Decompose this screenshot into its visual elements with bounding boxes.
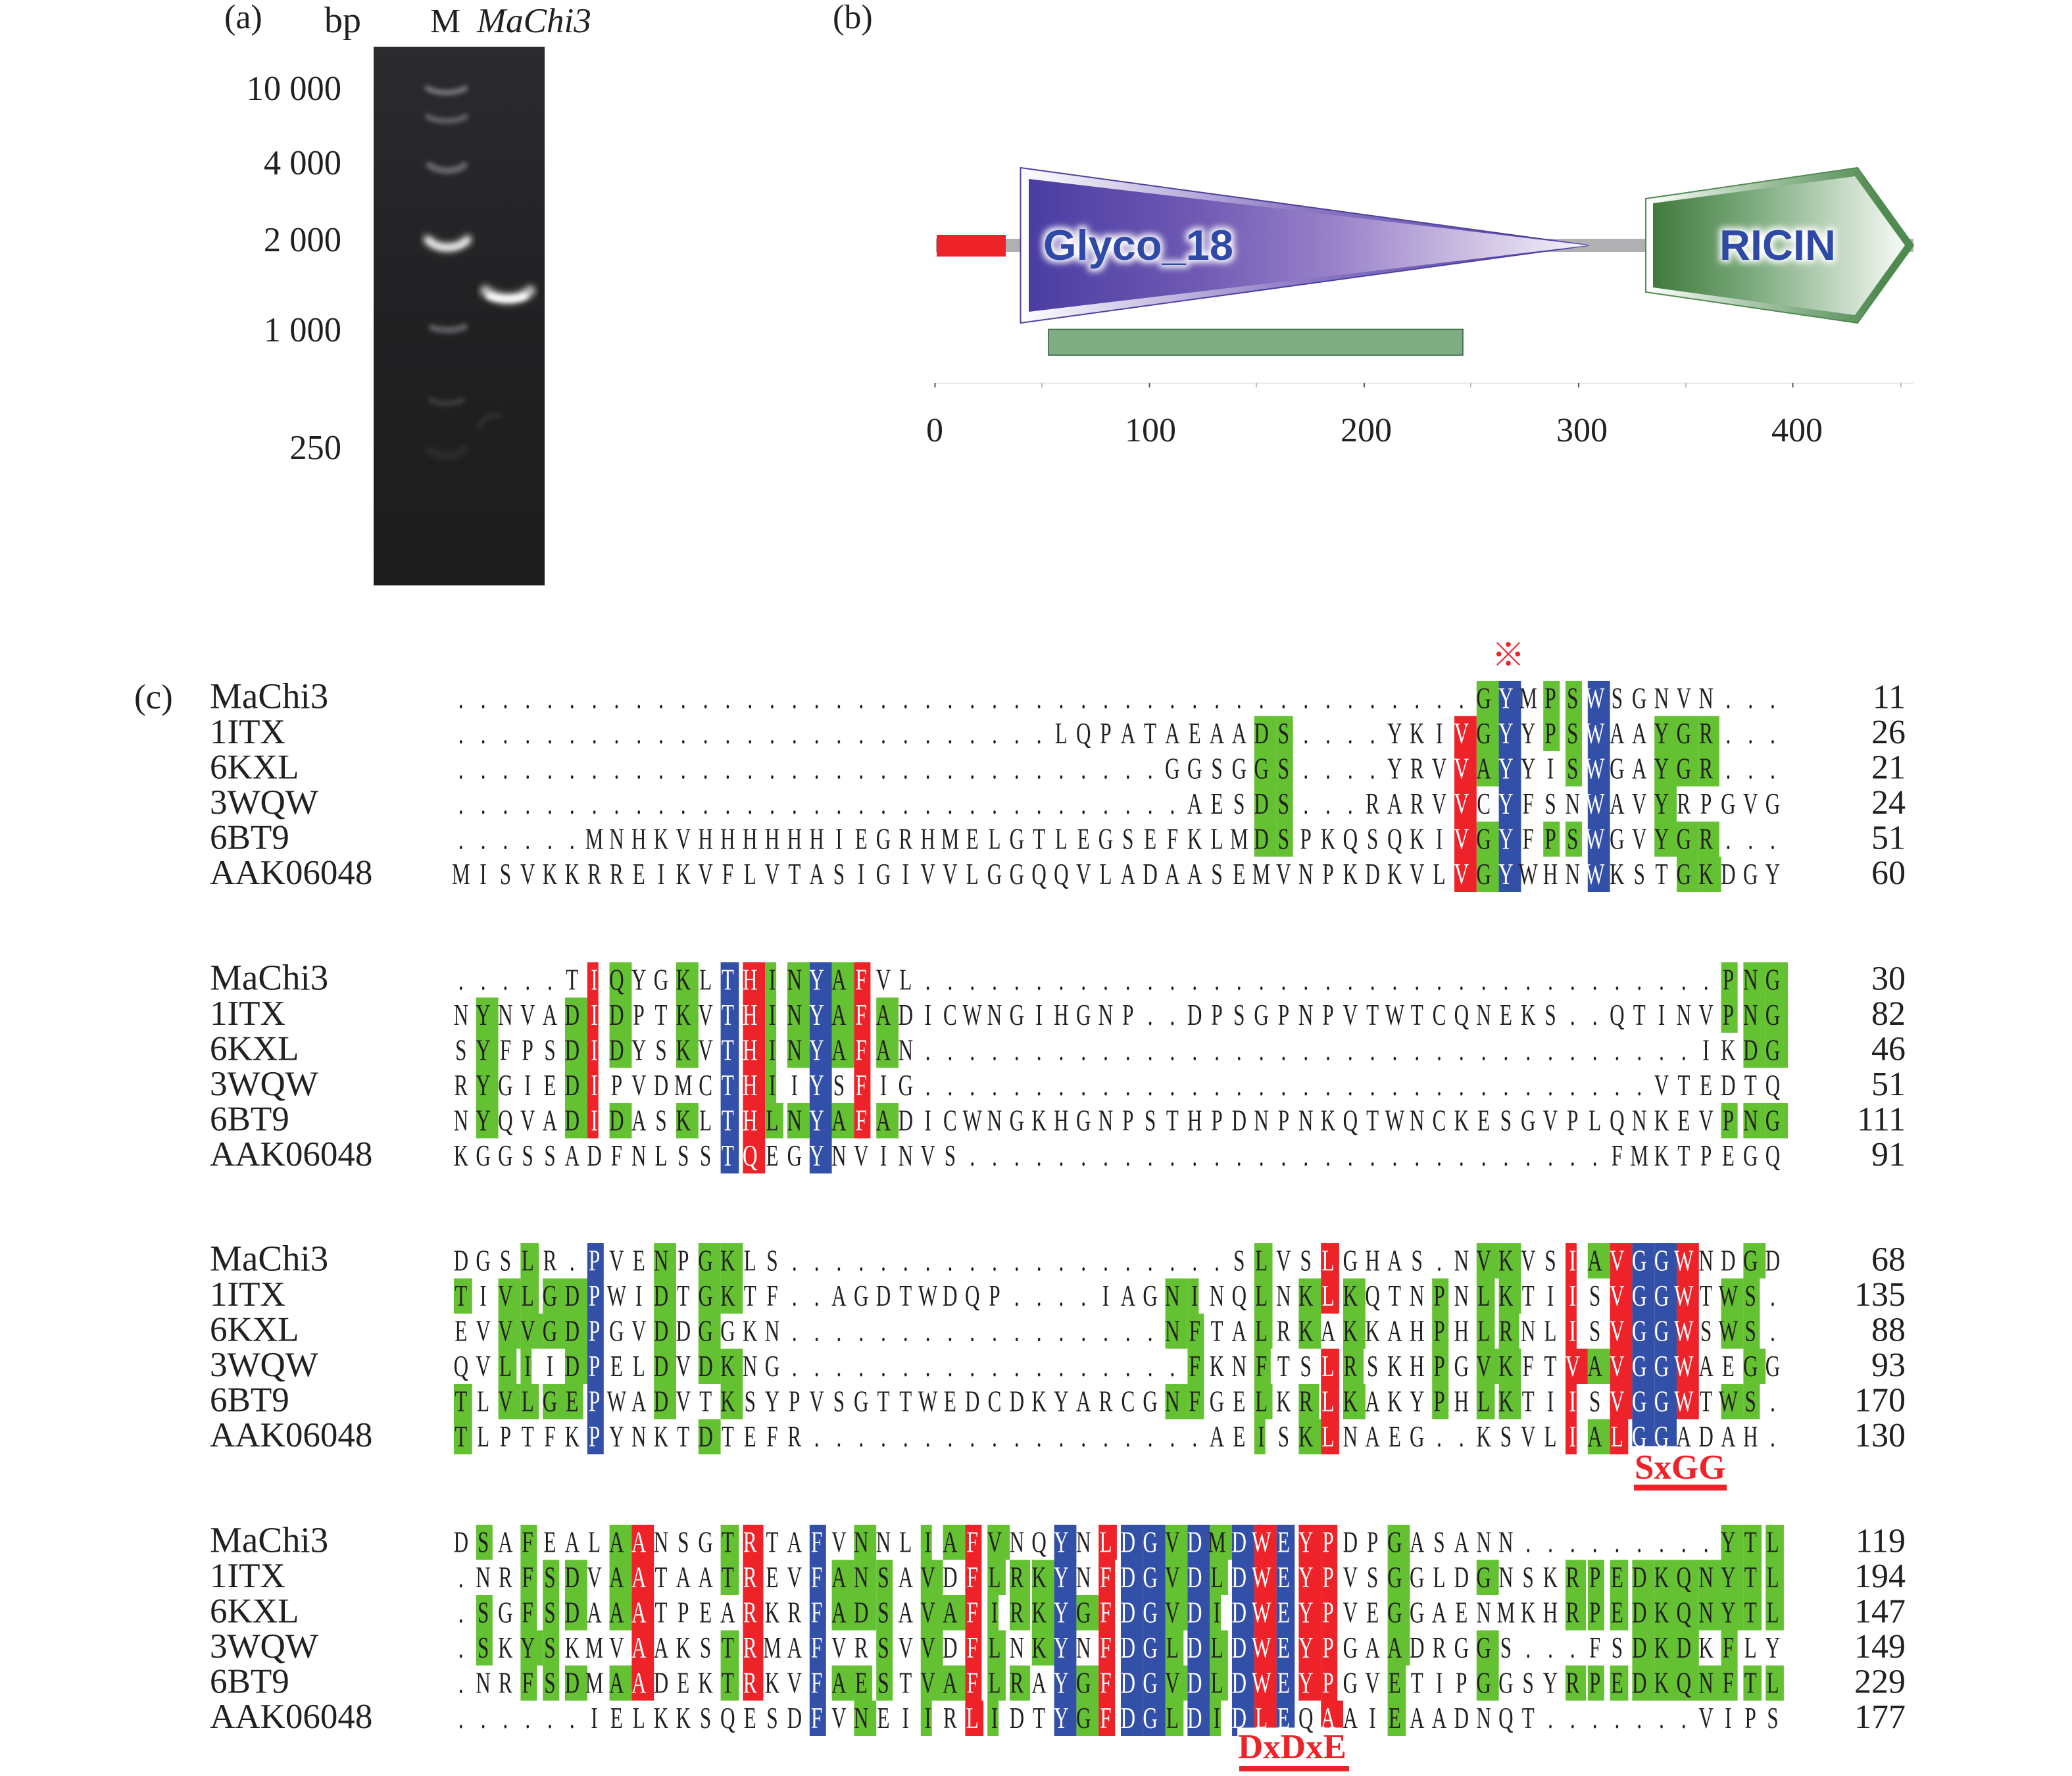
row 6KXL block 3 — [210, 1310, 1906, 1348]
row AAK06048 block 3: TLPTFK P YNKTDTEFR..................AEISK L NAEG..KSVL I A LGGADAH. — [455, 1420, 1775, 1454]
label MaChi3 lane: MaChi3 — [476, 2, 591, 40]
marker size labels — [247, 70, 341, 467]
row 6KXL block 4 — [210, 1592, 1906, 1630]
row 1ITX block 4: .NRFSDVAA TAAT R EV F ANSAVD F LRKYN FDGVD L DWEYP VSGGLDGNSKRPEDKQNYTL — [458, 1561, 1779, 1594]
row MaChi3 block 3: 68 — [1871, 1241, 1906, 1279]
scale axis: 300 — [1556, 412, 1608, 449]
row 6BT9 block 2: 111 — [1857, 1101, 1906, 1138]
row 3WQW block 2: 51 — [1871, 1066, 1906, 1103]
row 1ITX block 4 — [210, 1557, 1906, 1595]
row 6KXL block 2: 6KXL — [210, 1030, 299, 1068]
panel c: sequence alignment — [134, 637, 1906, 1771]
row 3WQW block 2 — [210, 1065, 1906, 1103]
row 3WQW block 4: 3WQW — [210, 1627, 318, 1665]
low complexity bar — [1048, 329, 1463, 355]
row 3WQW block 3 — [210, 1346, 1906, 1384]
row 6KXL block 3: EVVVGD P GVDDGGKN.................NFTALRKAKKAHPHLRNL I S VGGWSWS. — [455, 1315, 1775, 1348]
motif DxDxE: DxDxE — [1238, 1728, 1346, 1766]
row AAK06048 block 4: 177 — [1854, 1698, 1906, 1736]
row 6KXL block 2: SYFPSD I DYSKV TH INYA F AN...................................IKDG — [455, 1034, 1780, 1067]
row 3WQW block 1: 24 — [1871, 784, 1906, 822]
row 1ITX block 3: TIVLGD PWIDTGKTF..AGDTWDQP....IAGNINQLNK L KQTNPNLKTI I S VGGWTWS. — [455, 1279, 1775, 1313]
row 6BT9 block 4: 229 — [1854, 1663, 1906, 1701]
row MaChi3 block 2: MaChi3 — [210, 958, 328, 997]
row 3WQW block 2: 3WQW — [210, 1065, 318, 1103]
row AAK06048 block 3: 130 — [1854, 1417, 1906, 1454]
scale axis: 100 — [1125, 412, 1176, 449]
row AAK06048 block 2: AAK06048 — [210, 1135, 372, 1173]
row AAK06048 block 2: 91 — [1871, 1136, 1906, 1173]
row 6KXL block 1: 21 — [1871, 749, 1906, 787]
row AAK06048 block 1 — [210, 854, 1906, 892]
row AAK06048 block 2 — [210, 1135, 1906, 1173]
alignment block 2 — [210, 958, 1906, 1173]
row 1ITX block 1: 26 — [1871, 714, 1906, 751]
row 6BT9 block 3: 170 — [1854, 1381, 1906, 1419]
row 6KXL block 1: 6KXL — [210, 749, 299, 787]
row 6KXL block 1 — [210, 749, 1906, 787]
row 3WQW block 4 — [210, 1627, 1906, 1665]
row 3WQW block 4: 149 — [1854, 1628, 1906, 1665]
panel b: domain architecture — [833, 0, 1913, 449]
scale axis — [926, 383, 1913, 449]
row 6BT9 block 4 — [210, 1663, 1906, 1701]
scale axis: 0 — [926, 412, 943, 449]
row MaChi3 block 2: .....T I QYGKL TH INYA F VL....................................PNG — [458, 964, 1780, 997]
row 6BT9 block 4: 6BT9 — [210, 1663, 289, 1701]
row 6KXL block 4: 147 — [1854, 1593, 1906, 1630]
row 3WQW block 3: 93 — [1871, 1346, 1906, 1384]
row MaChi3 block 4: 119 — [1856, 1522, 1906, 1560]
row AAK06048 block 2: KGGSSADFNLSS TQ EGYNVINVS.............................FMKTPEGQ — [454, 1139, 1780, 1173]
row 3WQW block 1: 3WQW — [210, 783, 318, 822]
row 1ITX block 1: 1ITX — [210, 713, 285, 751]
row 3WQW block 3: QVLIID P ELDVDKNG..................FKNFTS L RSKHPGVKFT VAVGGWAEGG — [454, 1350, 1780, 1383]
marker size labels: 10 000 — [247, 70, 341, 108]
row MaChi3 block 1: ..............................................GYMPSWSGNVN... — [458, 682, 1775, 715]
row MaChi3 block 4: DSAFEALAANSGT R TA F VNNLIA F VNQYN LDGVDMDWEYP DPGASANN.........YTL — [454, 1526, 1779, 1559]
row 3WQW block 2: RYGIED I PVDMC TH II Y S F IG.................................VTEDTQ — [454, 1069, 1780, 1102]
row MaChi3 block 1: 11 — [1873, 679, 1906, 716]
row MaChi3 block 1 — [210, 676, 1906, 716]
row 1ITX block 4: 1ITX — [210, 1557, 285, 1595]
row 1ITX block 3: 1ITX — [210, 1275, 285, 1314]
row 6KXL block 2: 46 — [1871, 1030, 1906, 1068]
row 3WQW block 1 — [210, 783, 1906, 822]
row AAK06048 block 1: AAK06048 — [210, 854, 372, 892]
row MaChi3 block 3: MaChi3 — [210, 1238, 328, 1279]
row AAK06048 block 1: 60 — [1871, 854, 1906, 892]
RICIN domain — [1646, 168, 1913, 323]
scale axis: 400 — [1771, 412, 1823, 449]
row AAK06048 block 3 — [210, 1416, 1906, 1454]
row 6KXL block 4: 6KXL — [210, 1592, 299, 1630]
row 6BT9 block 4: .NRFSDMAADEKT R KV F AESTVA F LRAYG FDGVD L DWEYP GVETIPGGSYRPEDKQNFTL — [458, 1667, 1779, 1700]
reference mark: ※ — [1492, 637, 1525, 674]
Glyco_18 domain: Glyco_18 — [1043, 221, 1233, 269]
alignment block 4 — [210, 1519, 1906, 1771]
panel a: agarose gel — [224, 0, 591, 585]
row 1ITX block 2: 82 — [1871, 995, 1906, 1033]
row MaChi3 block 3: DGSLR. P VENPGKLS....................SLVS L GHAS.NVKVS I AVGGWNDGD — [454, 1245, 1780, 1277]
row AAK06048 block 1: MISVKKRREIKVFLVTASIGIVVLGGQQVLADAASEMVNPKDKVL VGYWHNWKSTGKDGY — [452, 858, 1780, 891]
alignment block 3 — [210, 1238, 1906, 1491]
row 6BT9 block 3: TLVLGE PWADVTKSYPVSGTTWEDCDKYARCGNFGELKR L KAKYPHLKTI I S VGGWTWS. — [455, 1385, 1775, 1418]
label M lane: M — [430, 3, 460, 40]
row 6BT9 block 1: 6BT9 — [210, 818, 289, 856]
row 6BT9 block 3 — [210, 1381, 1906, 1419]
motif SxGG: SxGG — [1635, 1448, 1725, 1487]
row 6KXL block 3: 88 — [1871, 1312, 1906, 1348]
row MaChi3 block 2 — [210, 958, 1906, 997]
row 6BT9 block 1: 51 — [1871, 820, 1906, 856]
row 6BT9 block 1 — [210, 818, 1906, 856]
row 1ITX block 1 — [210, 713, 1906, 751]
row 1ITX block 3: 135 — [1854, 1276, 1906, 1314]
row 6BT9 block 1: ......MNHKVHHHHHHIEGRHMELGTLEGSEFKLMDSPKQSQKI VGY FPSWGVYGR... — [458, 823, 1775, 856]
row 1ITX block 3 — [210, 1275, 1906, 1314]
alignment block 1 — [210, 676, 1906, 892]
gel image — [374, 47, 545, 585]
row 6KXL block 1: ................................GGSGGS....YRVVAYYISWGAYGR... — [458, 752, 1775, 785]
row 6BT9 block 3: 6BT9 — [210, 1381, 289, 1419]
row 3WQW block 4: .SKYSKMVAAKST RMA F VRSVVD F LNKYN FDG L D L DWEYP GAADRGGS...FSDKDKFLY — [458, 1631, 1780, 1665]
row MaChi3 block 2: 30 — [1871, 960, 1906, 997]
row 6KXL block 4: .SGFSDAAA TPEA R KR F ADSAVA F IRKYG FDGVD I DWEYP VEGGAENMKHRPEDKQNYTL — [458, 1596, 1779, 1629]
protein backbone — [936, 239, 1913, 252]
row 6BT9 block 2: 6BT9 — [210, 1100, 289, 1138]
signal peptide — [937, 235, 1006, 257]
scale axis: 200 — [1341, 412, 1392, 449]
row 6BT9 block 2 — [210, 1100, 1906, 1138]
row AAK06048 block 4: ......IELKKSQESD F VNEIIR L IDT YG FDG L D I DLE QAAIEAADNQT.......VIPS — [458, 1702, 1779, 1735]
row 1ITX block 2: NYNVAD I DPTKV TH INYA F ADICWNGIHGNP..DPSGPNPVTWTCQNEKS..QTINVPNG — [454, 999, 1780, 1032]
Glyco_18 domain — [1021, 168, 1589, 323]
row 6BT9 block 2: NYQVAD I DASKL TH LNYA F ADICWNGKHGNPSTHPDNPNKQTWNCKESGVPLQNKEVPNG — [454, 1104, 1780, 1137]
marker size labels: 250 — [289, 429, 341, 467]
row MaChi3 block 4: MaChi3 — [210, 1519, 328, 1560]
row 1ITX block 2 — [210, 995, 1906, 1033]
row MaChi3 block 4 — [210, 1519, 1906, 1560]
row MaChi3 block 3 — [210, 1238, 1906, 1279]
row 1ITX block 2: 1ITX — [210, 995, 285, 1033]
RICIN domain: RICIN — [1719, 221, 1836, 269]
marker size labels: 4 000 — [264, 144, 341, 182]
row AAK06048 block 3: AAK06048 — [210, 1416, 372, 1454]
row AAK06048 block 4: AAK06048 — [210, 1698, 372, 1736]
row MaChi3 block 1: MaChi3 — [210, 676, 328, 716]
row AAK06048 block 4 — [210, 1698, 1906, 1736]
row 3WQW block 3: 3WQW — [210, 1346, 318, 1384]
marker size labels: 2 000 — [264, 221, 341, 259]
marker size labels: 1 000 — [264, 311, 341, 349]
row 6KXL block 2 — [210, 1030, 1906, 1068]
row 3WQW block 1: .................................AESDS...RARVV C Y FSNWAVYRPGVG — [458, 787, 1780, 821]
row 6KXL block 3: 6KXL — [210, 1310, 299, 1348]
label bp: bp — [324, 0, 361, 41]
row 1ITX block 4: 194 — [1854, 1558, 1906, 1595]
row 1ITX block 1: ...........................LQPATAEAADS....YKI VGYYPSWAAYGR... — [458, 717, 1775, 751]
label (c): (c) — [134, 678, 173, 716]
